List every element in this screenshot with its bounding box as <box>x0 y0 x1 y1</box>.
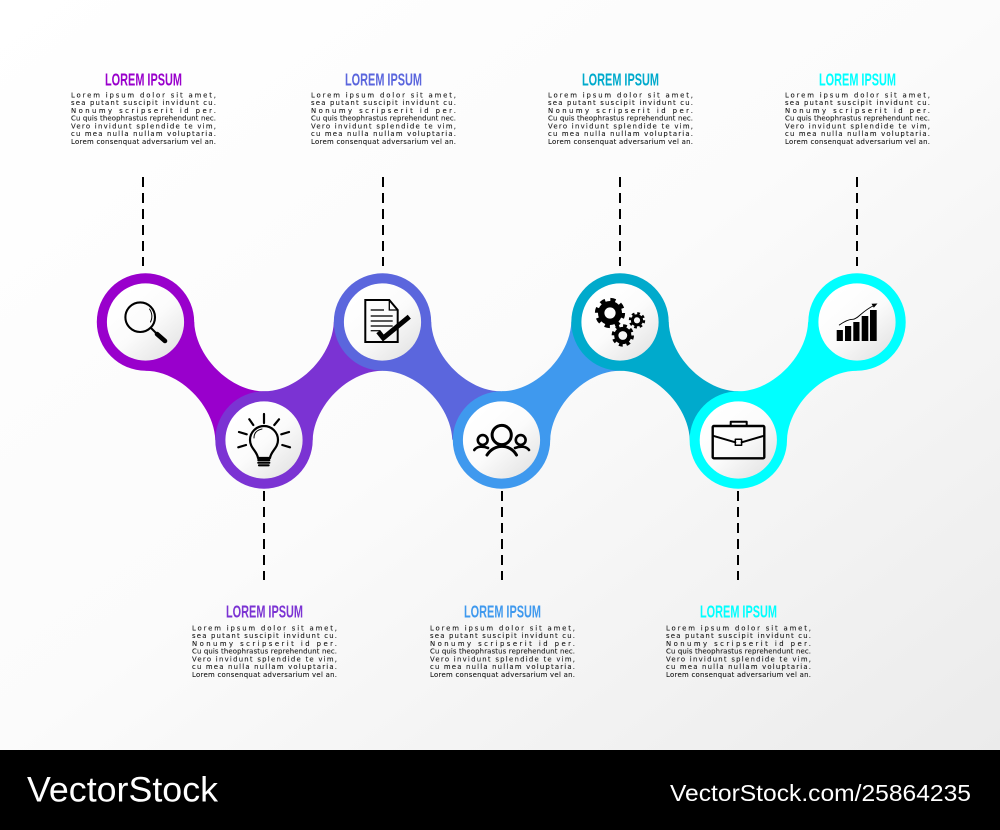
step 1 text: Vero invidunt splendide te vim, <box>71 122 216 130</box>
step 5 heading: LOREM IPSUM <box>582 69 659 89</box>
step 4 text: Nonumy scripserit id per. <box>430 640 575 648</box>
step 3 text: sea putant suscipit invidunt cu. <box>311 99 456 107</box>
icon: briefcase <box>700 401 777 479</box>
step 6 heading: LOREM IPSUM <box>700 602 777 622</box>
step 6 text: sea putant suscipit invidunt cu. <box>666 632 811 640</box>
step 4 text <box>430 624 575 679</box>
step 2 text: Vero invidunt splendide te vim, <box>192 655 337 663</box>
ring 7 <box>808 273 906 371</box>
step 1 text: Lorem consenquat adversarium vel an. <box>71 138 216 146</box>
step 4 text: Lorem consenquat adversarium vel an. <box>430 671 575 679</box>
step 4 text: Lorem ipsum dolor sit amet, <box>430 624 575 632</box>
icon: magnifying glass <box>107 283 184 361</box>
step 4 heading: LOREM IPSUM <box>464 602 541 622</box>
ring 3 <box>334 273 431 371</box>
step 2 text: Lorem consenquat adversarium vel an. <box>192 671 337 679</box>
step 3 text: Vero invidunt splendide te vim, <box>311 122 456 130</box>
ring 2 <box>215 391 313 489</box>
step 3 text: Lorem ipsum dolor sit amet, <box>311 91 456 99</box>
icon: light bulb <box>225 401 303 479</box>
step 4 text: Cu quis theophrastus reprehendunt nec. <box>430 648 575 656</box>
step 4 text: cu mea nulla nullam voluptaria. <box>430 663 575 671</box>
step 7 text: Lorem ipsum dolor sit amet, <box>785 91 930 99</box>
icon: document with check mark <box>344 283 421 361</box>
step 5 text: cu mea nulla nullam voluptaria. <box>548 130 693 138</box>
ring 5 <box>571 273 669 371</box>
step 5 text: Lorem consenquat adversarium vel an. <box>548 138 693 146</box>
icon: team of people <box>463 401 540 479</box>
step 5 text: Vero invidunt splendide te vim, <box>548 122 693 130</box>
step 5 text: sea putant suscipit invidunt cu. <box>548 99 693 107</box>
step 6 text: Vero invidunt splendide te vim, <box>666 655 811 663</box>
step 2 text: Lorem ipsum dolor sit amet, <box>192 624 337 632</box>
step 1 text: Cu quis theophrastus reprehendunt nec. <box>71 115 216 123</box>
step 7 text: Vero invidunt splendide te vim, <box>785 122 930 130</box>
step 3 text: Cu quis theophrastus reprehendunt nec. <box>311 115 456 123</box>
connector 6 <box>738 322 857 440</box>
step 1 text: Lorem ipsum dolor sit amet, <box>71 91 216 99</box>
step 5 text <box>548 91 693 146</box>
step 7 text <box>785 91 930 146</box>
step 6 text: cu mea nulla nullam voluptaria. <box>666 663 811 671</box>
step 3 text <box>311 91 456 146</box>
step 1 text <box>71 91 216 146</box>
icon: gears <box>581 283 659 361</box>
step 1 text: sea putant suscipit invidunt cu. <box>71 99 216 107</box>
step 5 text: Cu quis theophrastus reprehendunt nec. <box>548 115 693 123</box>
connector 4 <box>502 322 620 440</box>
step 2 text <box>192 624 337 679</box>
step 7 text: sea putant suscipit invidunt cu. <box>785 99 930 107</box>
step 7 text: cu mea nulla nullam voluptaria. <box>785 130 930 138</box>
step 3 text: Lorem consenquat adversarium vel an. <box>311 138 456 146</box>
step 3 text: cu mea nulla nullam voluptaria. <box>311 130 456 138</box>
connector 3 <box>382 322 501 440</box>
step 5 text: Lorem ipsum dolor sit amet, <box>548 91 693 99</box>
ring 4 <box>453 391 550 489</box>
step 1 heading: LOREM IPSUM <box>105 69 182 89</box>
footer logo: VectorStock <box>27 771 219 810</box>
step 2 heading: LOREM IPSUM <box>226 602 303 622</box>
step 1 text: Nonumy scripserit id per. <box>71 107 216 115</box>
dashed leader lines <box>143 177 857 580</box>
ring 6 <box>690 391 787 489</box>
connector 1 <box>146 322 264 440</box>
step 6 text: Cu quis theophrastus reprehendunt nec. <box>666 648 811 656</box>
step 2 text: cu mea nulla nullam voluptaria. <box>192 663 337 671</box>
step 3 text: Nonumy scripserit id per. <box>311 107 456 115</box>
step 3 heading: LOREM IPSUM <box>345 69 422 89</box>
step 6 text <box>666 624 811 679</box>
icon: growth chart <box>818 283 896 361</box>
step 6 text: Nonumy scripserit id per. <box>666 640 811 648</box>
timeline ribbon <box>97 273 906 489</box>
step 7 text: Lorem consenquat adversarium vel an. <box>785 138 930 146</box>
connector 5 <box>620 322 738 440</box>
step 6 text: Lorem ipsum dolor sit amet, <box>666 624 811 632</box>
step 6 text: Lorem consenquat adversarium vel an. <box>666 671 811 679</box>
step 2 text: Nonumy scripserit id per. <box>192 640 337 648</box>
step 7 text: Cu quis theophrastus reprehendunt nec. <box>785 115 930 123</box>
footer bar <box>0 750 1000 830</box>
footer url: VectorStock.com/25864235 <box>670 780 971 806</box>
step 2 text: Cu quis theophrastus reprehendunt nec. <box>192 648 337 656</box>
step 5 text: Nonumy scripserit id per. <box>548 107 693 115</box>
step 2 text: sea putant suscipit invidunt cu. <box>192 632 337 640</box>
ring 1 <box>97 273 194 371</box>
step 4 text: sea putant suscipit invidunt cu. <box>430 632 575 640</box>
step 1 text: cu mea nulla nullam voluptaria. <box>71 130 216 138</box>
step 4 text: Vero invidunt splendide te vim, <box>430 655 575 663</box>
connector 2 <box>264 322 382 440</box>
step 7 text: Nonumy scripserit id per. <box>785 107 930 115</box>
step 7 heading: LOREM IPSUM <box>819 69 896 89</box>
